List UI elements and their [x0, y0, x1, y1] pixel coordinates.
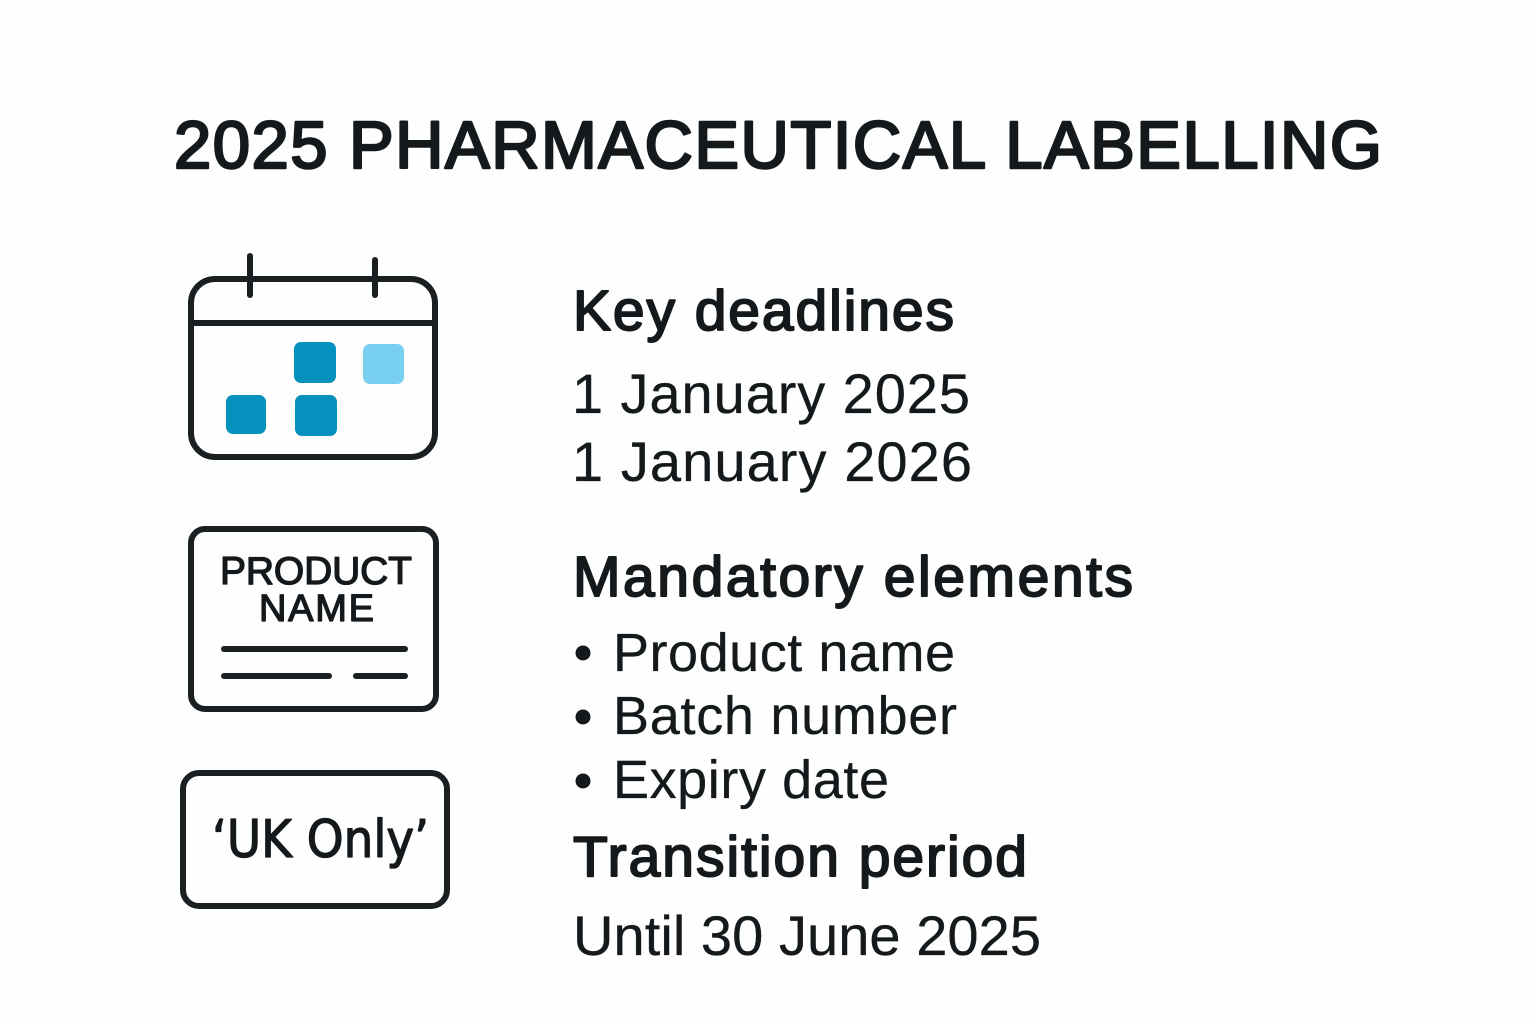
- heading: mandatory elements: Mandatory elements: [573, 545, 1133, 609]
- list: mandatory elements: Product name: [613, 623, 955, 683]
- icon: UK Only stamp: [183, 773, 447, 906]
- text: deadlines: 1 January 2025: [572, 362, 970, 425]
- text: deadlines: [572, 362, 972, 493]
- list: mandatory elements: Batch number: [613, 686, 957, 746]
- icon: product label: NAME: [259, 588, 374, 630]
- title: 2025 PHARMACEUTICAL LABELLING: [174, 108, 1382, 183]
- heading: transition period: Transition period: [573, 825, 1027, 889]
- icon: product label: [191, 529, 436, 709]
- icon: product label: PRODUCT: [220, 550, 412, 593]
- heading: key deadlines: Key deadlines: [573, 279, 954, 343]
- text: transition date: Until 30 June 2025: [573, 904, 1041, 967]
- icon: UK Only stamp: ‘UK Only’: [212, 810, 429, 870]
- list: mandatory elements: Expiry date: [613, 750, 889, 810]
- icon: calendar: [191, 256, 435, 457]
- list: mandatory elements: [576, 623, 957, 810]
- text: deadlines: 1 January 2026: [572, 430, 972, 493]
